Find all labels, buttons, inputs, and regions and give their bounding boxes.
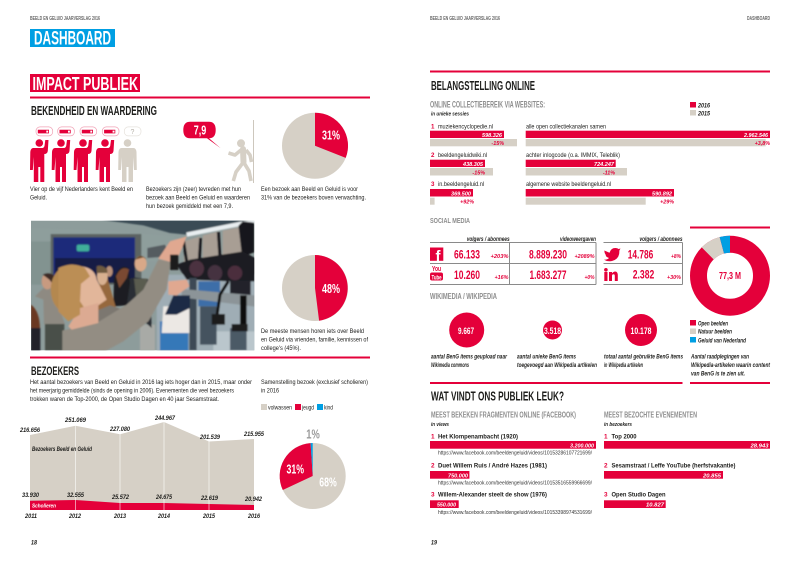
text: composition caption: Samenstelling bezoek (exclusief scholieren): [261, 379, 368, 386]
area chart: visitors 2011-2016: 251.069: [64, 418, 87, 424]
text: visitor satisfaction: [146, 186, 250, 210]
bar chart: top websites: 3: [431, 181, 435, 188]
bar chart: top websites: 598.326: [482, 133, 503, 139]
area chart: visitors 2011-2016: 33.930: [22, 493, 40, 499]
bar list: most visited events: [604, 411, 770, 508]
bar chart: collection channels: algemene website beeldengeluid.nl: [526, 181, 611, 188]
bar list: most visited events: Open Studio Dagen: [612, 492, 666, 499]
text: visitor satisfaction: hun bezoek gemiddeld met een 7,9.: [146, 203, 233, 210]
area chart: visitors 2011-2016: 2012: [68, 514, 82, 520]
bar list: most viewed Facebook fragments: MEEST BEKEKEN FRAGMENTEN ONLINE (FACEBOOK): [431, 411, 576, 420]
bubble: items used: totaal aantal gebruikte BenG items: [604, 354, 684, 360]
page number 18: 18: [31, 540, 38, 546]
bar list: most viewed Facebook fragments: Het Klompenambacht (1920): [438, 434, 518, 440]
bar chart: collection channels: alle open collectiekanalen samen: [526, 124, 606, 130]
bar chart: top websites: 438.305: [462, 162, 484, 168]
area chart: visitors 2011-2016: Bezoekers Beeld en Geluid: [32, 447, 92, 453]
donut chart: 77,3 M pageviews: [698, 244, 762, 307]
subheading: collection reach: in unieke sessies: [431, 112, 469, 118]
area chart: visitors 2011-2016: 2013: [113, 514, 127, 520]
area chart: visitors 2011-2016: 22.619: [200, 496, 219, 502]
area chart: visitors 2011-2016: Scholieren: [32, 504, 56, 510]
text: visitors paragraph: trokken waren de Top-2000, de Open Studio Dagen en 40 jaar Sesamstraat.: [30, 396, 219, 403]
bar chart: top websites: 1: [431, 124, 435, 130]
table: social media statistics: +0%: [584, 275, 595, 281]
legend: visitor types: [261, 404, 333, 412]
bar chart: top websites: -15%: [472, 170, 485, 176]
bar list: most viewed Facebook fragments: https://www.facebook.com/beeldengeluid/videos/10153286107721699/: [438, 450, 593, 456]
text: four of five know the institute: Vier op de vijf Nederlanders kent Beeld en: [30, 186, 133, 193]
area chart: visitors 2011-2016: [19, 416, 265, 520]
bar list: most visited events: 1: [604, 434, 608, 440]
bar chart: top websites: 2: [431, 152, 435, 159]
pie chart: visitor composition: [280, 426, 346, 509]
bubble: items added to articles: aantal unieke BenG items: [517, 354, 577, 360]
running header: right page: BEELD EN GELUID JAARVERSLAG 2016: [430, 16, 500, 22]
heading: Bekendheid en waardering: BEKENDHEID EN WAARDERING: [31, 104, 157, 118]
bubble: items added to articles: 3.518: [544, 326, 561, 337]
table: social media statistics: +30%: [667, 275, 681, 281]
text: visitors paragraph: [30, 379, 253, 403]
area chart: visitors 2011-2016: 216.656: [19, 428, 41, 434]
subheading: collection reach: ONLINE COLLECTIEBEREIK VIA WEBSITES:: [430, 99, 545, 109]
bubble: items added to articles: toegevoegd aan Wikipedia artikelen: [517, 363, 597, 369]
bubble: items uploaded: Wikimedia commons: [431, 363, 469, 369]
bar list: most viewed Facebook fragments: [430, 411, 596, 516]
text: pageviews explanation: van BenG is te zien uit.: [691, 372, 745, 378]
bar list: most visited events: in bezoekers: [604, 422, 632, 428]
legend: donut categories: Natuur beelden: [698, 330, 732, 336]
bar chart: top websites: -15%: [491, 141, 504, 147]
bar chart: top websites: beeldengeluidwiki.nl: [438, 152, 487, 159]
subheading: social media: SOCIAL MEDIA: [430, 218, 470, 225]
bar chart: top websites: +92%: [460, 200, 474, 206]
text: pageviews explanation: Aantal raadplegingen van: [690, 354, 749, 360]
text: visitors paragraph: Het aantal bezoekers van Beeld en Geluid in 2016 lag iets hoger dan in 2015, maar onder: [30, 379, 253, 386]
table: social media statistics: volgers / abonnees: [467, 237, 510, 243]
heading: Wat vindt ons publiek leuk: WAT VINDT ONS PUBLIEK LEUK?: [431, 390, 564, 404]
bar chart: top websites: 369.500: [451, 192, 472, 198]
table: social media statistics: You: [432, 266, 441, 273]
bar list: most visited events: 28.943: [749, 444, 769, 450]
bar list: most viewed Facebook fragments: 3.200.000: [570, 444, 595, 450]
page number 19: 19: [431, 540, 438, 546]
bar list: most viewed Facebook fragments: Willem-Alexander steelt de show (1976): [438, 492, 547, 499]
text: four of five know the institute: Geluid.: [30, 194, 47, 202]
bubble: items uploaded: 9.667: [458, 326, 474, 337]
bar list: most viewed Facebook fragments: https://www.facebook.com/beeldengeluid/videos/10153398974531699/: [438, 510, 593, 516]
running header: left page: BEELD EN GELUID JAARVERSLAG 2016: [30, 16, 100, 22]
area chart: visitors 2011-2016: 227.080: [109, 427, 131, 433]
icon: walking visitor: [228, 120, 254, 183]
table: social media statistics: 1.683.277: [530, 268, 567, 282]
legend: years: 2015: [697, 112, 711, 118]
legend: visitor types: jeugd: [301, 404, 314, 412]
area chart: visitors 2011-2016: 244.967: [154, 416, 176, 422]
text: visitors paragraph: het meerjarig gemiddelde (sinds de opening in 2006). Evenementen die veel bezoekers: [30, 388, 234, 394]
table: social media statistics: +2089%: [574, 254, 595, 260]
table: social media statistics: 2.382: [633, 268, 654, 282]
legend: donut categories: Geluid van Nederland: [698, 338, 746, 344]
pie chart: 31% above expectation: [282, 113, 348, 179]
running header: right page: DASHBOARD: [747, 16, 770, 22]
area chart: visitors 2011-2016: 215.955: [243, 432, 265, 438]
text: visitor satisfaction: Bezoekers zijn (zeer) tevreden met hun: [146, 186, 241, 193]
bar chart: top websites: in.beeldengeluid.nl: [438, 181, 484, 188]
table: social media statistics: Tube: [432, 274, 442, 281]
text: word of mouth: De meeste mensen horen iets over Beeld: [261, 328, 364, 335]
photo: visitors at headset rack: [31, 220, 257, 351]
table: social media statistics: [430, 237, 683, 284]
area chart: visitors 2011-2016: 20.942: [244, 497, 263, 503]
bubble: items uploaded: aantal BenG items geupload naar: [431, 354, 508, 360]
bubble: items used: [604, 314, 684, 369]
bar list: most viewed Facebook fragments: 750.000: [448, 474, 469, 480]
legend: years: 2016: [697, 104, 711, 110]
title: Dashboard: DASHBOARD: [34, 28, 111, 49]
pie chart: 48% word of mouth: [282, 255, 348, 321]
icon: five people with speech bubbles: [30, 127, 141, 182]
table: social media statistics: 10.260: [454, 268, 480, 282]
table: social media statistics: +16%: [494, 275, 509, 281]
text: composition caption: [261, 379, 368, 394]
text: four of five know the institute: [30, 186, 133, 202]
table: social media statistics: 66.133: [454, 247, 480, 261]
bar list: most visited events: 10.827: [646, 502, 665, 508]
bar list: most viewed Facebook fragments: in views: [431, 422, 449, 428]
table: social media statistics: +203%: [490, 254, 509, 260]
subheading: collection reach: [430, 99, 545, 118]
text: 31% above expectation: 31% van de bezoekers boven verwachting.: [261, 194, 366, 202]
bar list: most visited events: 2: [604, 462, 608, 470]
legend: visitor types: kind: [324, 404, 333, 412]
table: social media statistics: volgers / abonnees: [640, 237, 683, 243]
heading: Impact publiek: IMPACT PUBLIEK: [32, 73, 138, 94]
bar chart: collection channels: [526, 124, 770, 206]
text: word of mouth: en Geluid via vrienden, familie, kennissen of: [261, 336, 368, 344]
bar chart: collection channels: 724.247: [594, 162, 615, 168]
pie chart: 48% word of mouth: 48%: [322, 281, 340, 296]
bar list: most visited events: MEEST BEZOCHTE EVENEMENTEN: [604, 411, 697, 420]
bar list: most visited events: Top 2000: [612, 434, 637, 440]
legend: visitor types: volwassen: [268, 404, 292, 412]
pie chart: visitor composition: 68%: [319, 474, 337, 489]
title: Dashboard: [30, 28, 115, 49]
bubble: items uploaded: [431, 312, 508, 369]
area chart: visitors 2011-2016: 2016: [247, 514, 261, 520]
area chart: visitors 2011-2016: 32.555: [67, 493, 85, 499]
heading: Impact publiek: [30, 73, 370, 98]
legend: years: [690, 102, 711, 118]
area chart: visitors 2011-2016: 2015: [202, 514, 216, 520]
bar list: most visited events: 3: [604, 492, 608, 499]
bar chart: collection channels: -11%: [603, 170, 615, 176]
callout: rating 7,9: [183, 122, 221, 148]
bar list: most visited events: 20.855: [702, 474, 722, 480]
legend: donut categories: Open beelden: [698, 322, 728, 328]
bubble: items used: 10.178: [630, 326, 652, 337]
pie chart: 31% above expectation: 31%: [322, 127, 340, 142]
subheading: Wikimedia / Wikipedia: WIKIMEDIA / WIKIPEDIA: [430, 292, 497, 301]
running header: right page: [430, 16, 770, 22]
bubble: items added to articles: [517, 320, 597, 369]
text: word of mouth: college's (45%).: [261, 345, 301, 352]
bar chart: collection channels: 2.962.546: [743, 133, 769, 139]
area chart: visitors 2011-2016: 2011: [24, 514, 38, 520]
pie chart: visitor composition: 31%: [287, 461, 304, 476]
table: social media statistics: +8%: [671, 254, 681, 260]
table: social media statistics: videoweergaven: [560, 237, 596, 243]
bar list: most viewed Facebook fragments: 3: [431, 492, 435, 499]
bar list: most visited events: Sesamstraat / Leffe YouTube (herfstvakantie): [612, 462, 736, 470]
bar chart: collection channels: achter inlogcode (o.a. IMMIX, Teleblik): [526, 152, 620, 159]
bubble: items used: in Wikipedia artikelen: [604, 363, 643, 369]
text: 31% above expectation: [261, 186, 366, 202]
text: pageviews explanation: Wikipedia-artikelen waarin content: [691, 363, 771, 369]
donut chart: 77,3 M pageviews: 77,3 M: [719, 270, 741, 282]
area chart: visitors 2011-2016: 24.675: [155, 495, 173, 501]
area chart: visitors 2011-2016: 201.539: [199, 435, 221, 441]
text: composition caption: in 2016: [261, 388, 279, 394]
bar list: most viewed Facebook fragments: https://www.facebook.com/beeldengeluid/videos/10153516559966699/: [438, 480, 593, 486]
table: social media statistics: 8.889.230: [529, 247, 567, 261]
bar list: most viewed Facebook fragments: Duet Willem Ruis / André Hazes (1981): [438, 462, 547, 470]
table: social media statistics: f: [436, 248, 442, 265]
heading: Bezoekers: BEZOEKERS: [31, 364, 79, 378]
bar chart: top websites: muziekencyclopedie.nl: [438, 124, 493, 130]
text: visitor satisfaction: bezoek aan Beeld en Geluid en waarderen: [146, 194, 250, 202]
bar chart: collection channels: 590.892: [652, 192, 673, 198]
text: pageviews explanation: [690, 354, 771, 378]
area chart: visitors 2011-2016: 25.572: [111, 495, 130, 501]
bar list: most viewed Facebook fragments: 1: [431, 434, 435, 440]
icon: five people with speech bubbles: ?: [131, 129, 135, 136]
bar list: most viewed Facebook fragments: 2: [431, 462, 435, 470]
table: social media statistics: 14.786: [628, 247, 653, 261]
area chart: visitors 2011-2016: 2014: [157, 514, 171, 520]
callout: rating 7,9: 7,9: [194, 122, 206, 137]
text: word of mouth: [261, 328, 368, 352]
bar chart: collection channels: +3,8%: [755, 141, 770, 147]
heading: Belangstelling online: BELANGSTELLING ONLINE: [431, 78, 535, 93]
text: 31% above expectation: Een bezoek aan Beeld en Geluid is voor: [261, 186, 359, 193]
bar list: most viewed Facebook fragments: 550.000: [437, 502, 457, 508]
bar chart: top websites: [430, 124, 517, 206]
pie chart: visitor composition: 1%: [306, 426, 320, 441]
bar chart: collection channels: +29%: [660, 200, 674, 206]
legend: donut categories: [690, 320, 746, 344]
